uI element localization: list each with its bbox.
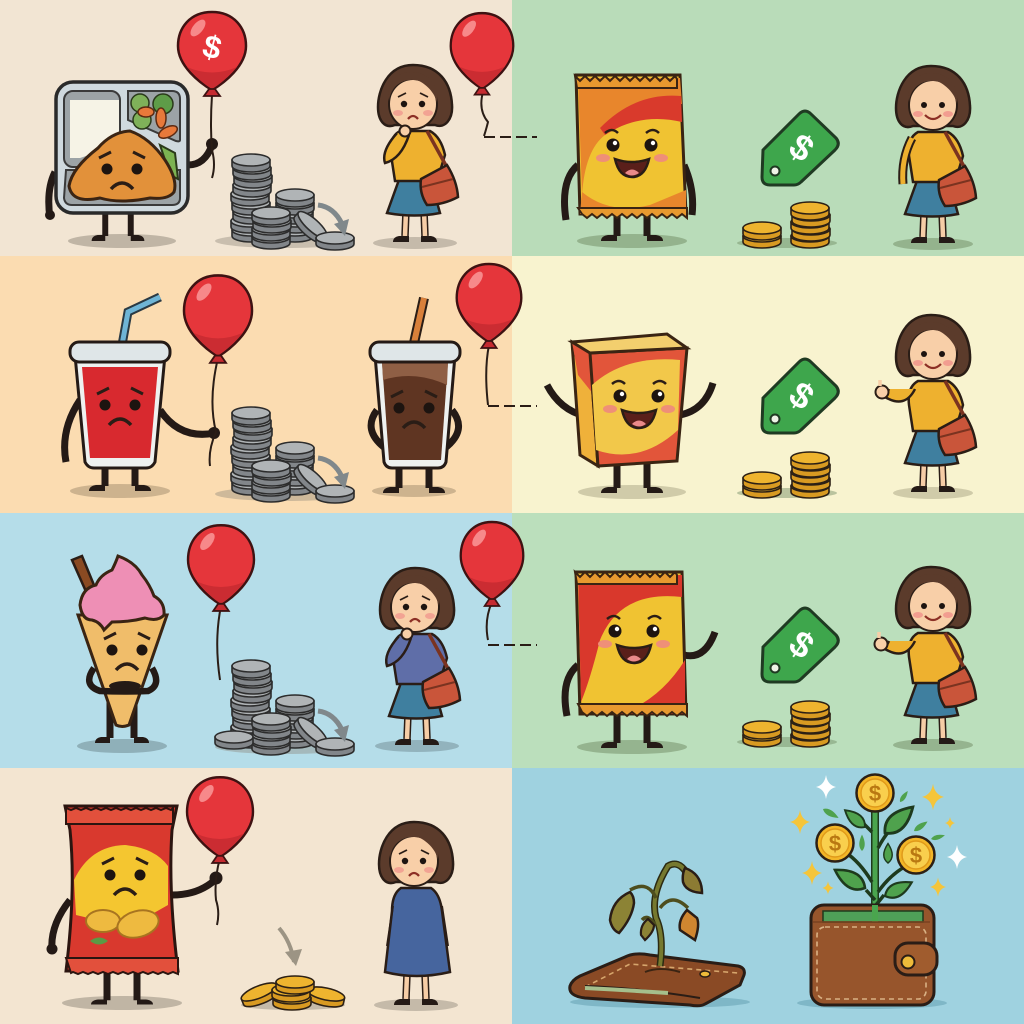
panel: row 4 right background — [512, 768, 1024, 1024]
gold coin stacks — [737, 701, 837, 747]
icon: wilting sprout on flat wallet — [570, 864, 750, 1008]
woman: worried in purple sweater — [375, 568, 460, 752]
balloon with dashed connector — [461, 522, 537, 645]
grey coin stacks with falling arrow — [215, 407, 355, 503]
woman: happy in yellow sweater — [893, 66, 976, 250]
character: happy snack bag — [564, 75, 693, 248]
spilled gold coins with arrow — [239, 928, 346, 1010]
character: sad red chip bag — [46, 806, 222, 1010]
panel: row 2 left background — [0, 256, 512, 513]
woman: sad in blue dress — [374, 822, 458, 1011]
character: sad red soda cup — [65, 297, 220, 498]
balloon above coins — [188, 525, 254, 680]
balloon with dashed connector — [457, 264, 537, 406]
gold coin stacks — [737, 452, 837, 498]
woman: worried in yellow sweater — [373, 65, 458, 249]
character: sad ice cream cone — [72, 556, 167, 753]
panel: row 3 right background — [512, 513, 1024, 768]
icon: growing money plant in wallet — [790, 774, 967, 1009]
balloon held by chip bag — [187, 777, 253, 925]
balloon with dollar sign — [178, 12, 246, 178]
character: happy juice box — [547, 334, 713, 499]
woman: thumbs up in yellow sweater — [874, 567, 976, 751]
character: sad coffee cup — [370, 298, 460, 497]
grey coin stacks with falling arrow — [215, 154, 355, 250]
panel: row 1 right background — [512, 0, 1024, 256]
price tag: green dollar — [762, 111, 838, 185]
price tag: green dollar — [762, 608, 838, 682]
panel: row 1 left background — [0, 0, 512, 256]
woman: thumbs up in yellow sweater — [876, 315, 976, 499]
panel: row 3 left background — [0, 513, 512, 768]
grey coin stacks with falling arrow — [215, 660, 355, 756]
balloon with dollar sign: $ — [199, 27, 226, 67]
character: happy red snack bag — [565, 572, 715, 754]
balloon held by soda cup — [184, 275, 252, 466]
balloon with dashed connector — [451, 13, 537, 137]
panel: row 2 right background — [512, 256, 1024, 513]
panel: row 4 left background — [0, 768, 512, 1024]
gold coin stacks — [737, 202, 837, 248]
price tag: green dollar — [762, 359, 838, 433]
character: sad meal tray — [45, 82, 218, 248]
